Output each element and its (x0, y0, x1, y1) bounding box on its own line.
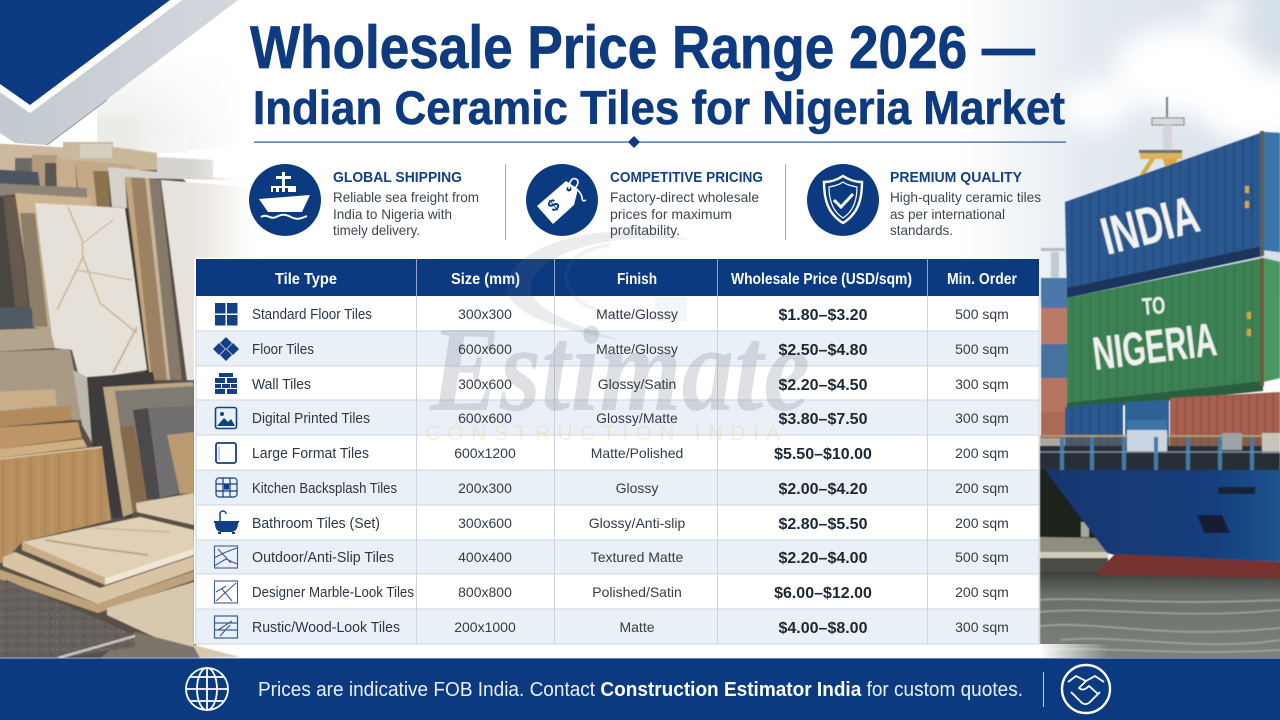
table header (196, 259, 1039, 296)
row: Large Format Tiles (216, 443, 1009, 463)
row: Wall Tiles: 300 sqm (955, 376, 1009, 392)
row: Digital Printed Tiles: 300 sqm (955, 410, 1009, 426)
row: Outdoor/Anti-Slip Tiles: 400x400 (458, 549, 512, 565)
row: Digital Printed Tiles: Glossy/Matte (596, 410, 678, 426)
description (333, 189, 479, 238)
table header: Wholesale Price (USD/sqm) (731, 271, 912, 288)
row: Kitchen Backsplash Tiles: Kitchen Backsplash Tiles (252, 481, 397, 497)
row: Designer Marble-Look Tiles: $6.00–$12.00 (774, 585, 872, 602)
row: Designer Marble-Look Tiles (214, 581, 1009, 603)
table body stripes (196, 296, 1039, 644)
description: profitability. (610, 222, 680, 238)
container: INDIA (1065, 131, 1280, 298)
row: Floor Tiles: 500 sqm (955, 341, 1009, 357)
row: Rustic/Wood-Look Tiles: Rustic/Wood-Look Tiles (252, 620, 400, 636)
icon: globe (186, 668, 228, 710)
row: Kitchen Backsplash Tiles: $2.00–$4.20 (779, 481, 868, 498)
icon: picture (216, 408, 236, 428)
row: Designer Marble-Look Tiles: Polished/Satin (592, 584, 682, 600)
flat marble slabs (0, 493, 240, 658)
feature: global shipping (249, 164, 479, 238)
icon: shield check (807, 164, 879, 236)
row: Bathroom Tiles (Set): Bathroom Tiles (Set) (252, 516, 380, 532)
row: Floor Tiles: Floor Tiles (252, 342, 314, 358)
row: Wall Tiles: Wall Tiles (252, 377, 311, 393)
row: Kitchen Backsplash Tiles: 200 sqm (955, 480, 1009, 496)
row: Rustic/Wood-Look Tiles: 200x1000 (454, 619, 516, 635)
row: Wall Tiles: $2.20–$4.50 (779, 377, 868, 394)
row: Large Format Tiles: Large Format Tiles (252, 446, 369, 462)
price table (196, 231, 1039, 644)
heading: GLOBAL SHIPPING (333, 169, 462, 186)
row: Standard Floor Tiles (215, 303, 1009, 326)
row: Digital Printed Tiles: $3.80–$7.50 (779, 411, 868, 428)
row: Rustic/Wood-Look Tiles: $4.00–$8.00 (779, 620, 868, 637)
row: Large Format Tiles: Matte/Polished (591, 445, 683, 461)
table header: Size (mm) (451, 271, 520, 288)
row: Designer Marble-Look Tiles: 200 sqm (955, 584, 1009, 600)
description: standards. (890, 222, 953, 238)
description (890, 189, 1041, 238)
row: Bathroom Tiles (Set): 200 sqm (955, 515, 1009, 531)
icon: ship (249, 164, 321, 236)
icon: price tag (526, 164, 598, 236)
wood planks stacked (0, 389, 111, 563)
container: INDIA: INDIA (1095, 185, 1205, 267)
row: Designer Marble-Look Tiles: Designer Marble-Look Tiles (252, 585, 414, 601)
icon: brick wall (215, 373, 237, 394)
icon: large tile (216, 443, 236, 463)
tall narrow tiles (122, 177, 182, 380)
icon: backsplash grid (216, 478, 237, 497)
row: Large Format Tiles: 600x1200 (454, 445, 516, 461)
ship hull (1045, 470, 1280, 578)
icon: marble tile (214, 581, 238, 603)
description: India to Nigeria with (333, 206, 452, 222)
row: Bathroom Tiles (Set): Glossy/Anti-slip (589, 515, 685, 531)
icon: four-square tile (215, 303, 238, 326)
row: Rustic/Wood-Look Tiles: Matte (619, 619, 655, 635)
row: Standard Floor Tiles: 500 sqm (955, 306, 1009, 322)
row: Kitchen Backsplash Tiles (216, 478, 1009, 498)
right marble tile (161, 180, 250, 380)
row: Outdoor/Anti-Slip Tiles: Textured Matte (591, 549, 684, 565)
haze behind tile stacks (97, 40, 242, 154)
row: Outdoor/Anti-Slip Tiles: 500 sqm (955, 549, 1009, 565)
row: Large Format Tiles: $5.50–$10.00 (774, 446, 872, 463)
icon: bathtub (214, 511, 239, 534)
description (610, 189, 759, 238)
fade overlays on tile photo (190, 145, 255, 644)
description: as per international (890, 206, 1005, 222)
row: Floor Tiles: $2.50–$4.80 (779, 342, 868, 359)
row: Standard Floor Tiles: 300x300 (458, 306, 512, 322)
row: Designer Marble-Look Tiles: 800x800 (458, 584, 512, 600)
row: Kitchen Backsplash Tiles: Glossy (616, 480, 658, 496)
watermark: Estimate (429, 302, 810, 437)
photo: stacked ceramic tiles (0, 142, 250, 658)
icon: diamond tile (213, 337, 239, 361)
row: Bathroom Tiles (Set): 300x600 (458, 515, 512, 531)
icon: handshake (1062, 665, 1110, 713)
feature: competitive pricing (526, 164, 763, 238)
description: timely delivery. (333, 222, 420, 238)
row: Floor Tiles: Matte/Glossy (596, 341, 678, 357)
icon: cracked tile (214, 546, 238, 568)
description: prices for maximum (610, 206, 732, 222)
row: Outdoor/Anti-Slip Tiles (214, 546, 1009, 568)
row: Rustic/Wood-Look Tiles: 300 sqm (955, 619, 1009, 635)
description: Reliable sea freight from (333, 189, 479, 205)
watermark (425, 231, 810, 445)
row: Wall Tiles: Glossy/Satin (598, 376, 676, 392)
back row of tiles (0, 142, 240, 208)
row: Outdoor/Anti-Slip Tiles: $2.20–$4.00 (779, 550, 868, 567)
row: Standard Floor Tiles: Standard Floor Tiles (252, 307, 372, 323)
container: TO NIGERIA (1067, 258, 1280, 411)
dock and water (1040, 470, 1280, 662)
row: Wall Tiles: 300x600 (458, 376, 512, 392)
title (250, 14, 1065, 134)
row: Bathroom Tiles (Set) (214, 511, 1009, 534)
footer text: Prices are indicative FOB India. Contact Construction Estimator India for custom quotes. (258, 678, 1023, 701)
photo: container ship (1040, 97, 1280, 662)
table header: Finish (617, 271, 657, 288)
title line 2: Indian Ceramic Tiles for Nigeria Market (253, 81, 1065, 134)
title line 1: Wholesale Price Range 2026 — (250, 14, 1035, 81)
row: Outdoor/Anti-Slip Tiles: Outdoor/Anti-Slip Tiles (252, 550, 394, 566)
icon: price tag: $ (544, 195, 564, 216)
dark and grey upright tiles (87, 372, 194, 518)
watermark: CONSTRUCTION INDIA (425, 422, 780, 445)
icon: wood planks (214, 616, 238, 638)
table header: Min. Order (947, 271, 1017, 288)
footer bar (0, 658, 1280, 720)
container: TO NIGERIA: TO (1141, 292, 1166, 321)
description: High-quality ceramic tiles (890, 189, 1041, 205)
heading: PREMIUM QUALITY (890, 169, 1022, 186)
row: Bathroom Tiles (Set): $2.80–$5.50 (779, 516, 868, 533)
row: Standard Floor Tiles: $1.80–$3.20 (779, 307, 868, 324)
feature: premium quality (807, 164, 1041, 238)
heading: COMPETITIVE PRICING (610, 169, 763, 186)
large veined marble tile (35, 203, 147, 380)
left leaning tiles (0, 183, 91, 328)
ship mast (1139, 97, 1184, 176)
left beige stacks (0, 307, 92, 443)
table header: Tile Type (275, 271, 337, 288)
background container stack (1041, 248, 1067, 438)
row: Digital Printed Tiles: Digital Printed Tiles (252, 411, 370, 427)
granite slab (0, 580, 135, 658)
deck railing (1040, 430, 1280, 471)
lower containers (1065, 392, 1280, 452)
description: Factory-direct wholesale (610, 189, 759, 205)
corner banner graphic (0, 0, 238, 145)
sky background with clouds (960, 0, 1280, 300)
row: Large Format Tiles: 200 sqm (955, 445, 1009, 461)
row: Rustic/Wood-Look Tiles (214, 616, 1009, 638)
row: Floor Tiles (213, 337, 1009, 361)
title divider with diamond (254, 136, 1066, 148)
row: Wall Tiles (215, 373, 1009, 394)
row: Kitchen Backsplash Tiles: 200x300 (458, 480, 512, 496)
row: Standard Floor Tiles: Matte/Glossy (596, 306, 678, 322)
row: Digital Printed Tiles: 600x600 (458, 410, 512, 426)
row: Floor Tiles: 600x600 (458, 341, 512, 357)
row: Digital Printed Tiles (216, 408, 1009, 428)
